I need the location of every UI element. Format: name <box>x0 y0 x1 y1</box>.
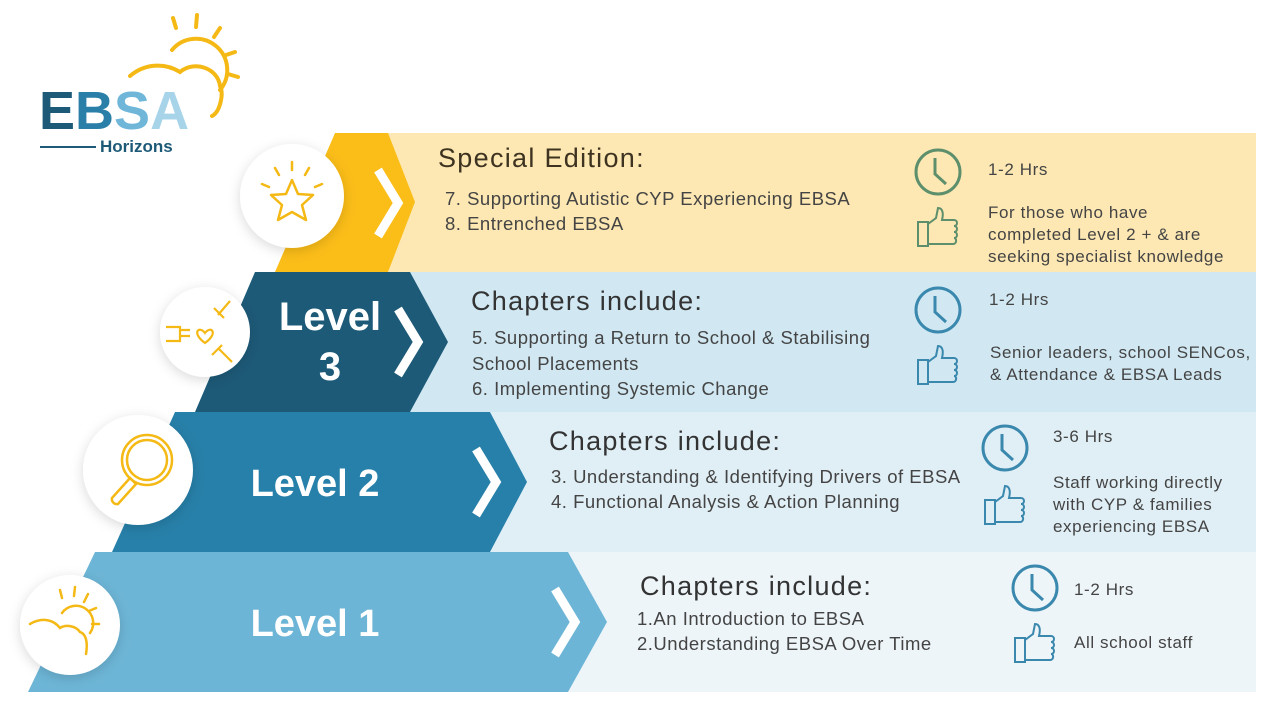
icon: hands circle <box>160 287 250 377</box>
special info: 1-2 Hrs <box>988 160 1048 179</box>
text: Senior leaders, school SENCos, <box>990 343 1251 362</box>
band: special edition <box>275 133 415 272</box>
level 3 label: 3 <box>319 345 341 389</box>
level 2 text: Chapters include: <box>549 426 781 456</box>
band: level 1 <box>28 552 607 692</box>
level 2 text: 3. Understanding & Identifying Drivers of EBSA <box>551 466 961 487</box>
text: with CYP & families <box>1053 495 1212 514</box>
text: completed Level 2 + & are <box>988 225 1201 244</box>
level 1 info: 1-2 Hrs <box>1074 580 1134 599</box>
chevrons <box>378 170 575 655</box>
logo subtitle: Horizons <box>100 137 173 156</box>
text: & Attendance & EBSA Leads <box>990 365 1222 384</box>
special edition text: Special Edition: <box>438 143 645 173</box>
band: level 3 <box>195 272 448 412</box>
level 1 text <box>637 571 932 654</box>
text: Staff working directly <box>1053 473 1223 492</box>
text: seeking specialist knowledge <box>988 247 1224 266</box>
logo sun <box>130 15 238 116</box>
level 3 label <box>279 295 381 389</box>
level 3 text: 5. Supporting a Return to School & Stabilising <box>472 327 870 348</box>
level 3 label: Level <box>279 295 381 339</box>
level 1 text: 1.An Introduction to EBSA <box>637 608 864 629</box>
level 3 text <box>471 286 870 399</box>
text: For those who have <box>988 203 1148 222</box>
special edition text <box>438 143 850 234</box>
level 1 text: 2.Understanding EBSA Over Time <box>637 633 932 654</box>
logo text: EBSA <box>39 81 189 141</box>
level 1 label: Level 1 <box>251 603 379 645</box>
icon: star circle <box>240 144 344 248</box>
level 2 label: Level 2 <box>251 463 379 505</box>
band: level 2 <box>112 412 527 552</box>
level 2 text <box>549 426 961 512</box>
level 2 info: 3-6 Hrs <box>1053 427 1113 446</box>
icon: magnifier circle <box>83 415 193 525</box>
special edition text: 8. Entrenched EBSA <box>445 212 624 234</box>
text: All school staff <box>1074 633 1193 652</box>
clocks & thumbs <box>916 150 1057 610</box>
level 3 text: 6. Implementing Systemic Change <box>472 378 769 399</box>
level 3 text: School Placements <box>472 352 639 374</box>
special edition text: 7. Supporting Autistic CYP Experiencing EBSA <box>445 188 850 209</box>
icon: sun circle <box>20 575 120 675</box>
text: experiencing EBSA <box>1053 517 1210 536</box>
level 2 text: 4. Functional Analysis & Action Planning <box>551 491 900 512</box>
level 3 text: Chapters include: <box>471 286 703 316</box>
level 3 info: 1-2 Hrs <box>989 290 1049 309</box>
level 1 text: Chapters include: <box>640 571 872 601</box>
